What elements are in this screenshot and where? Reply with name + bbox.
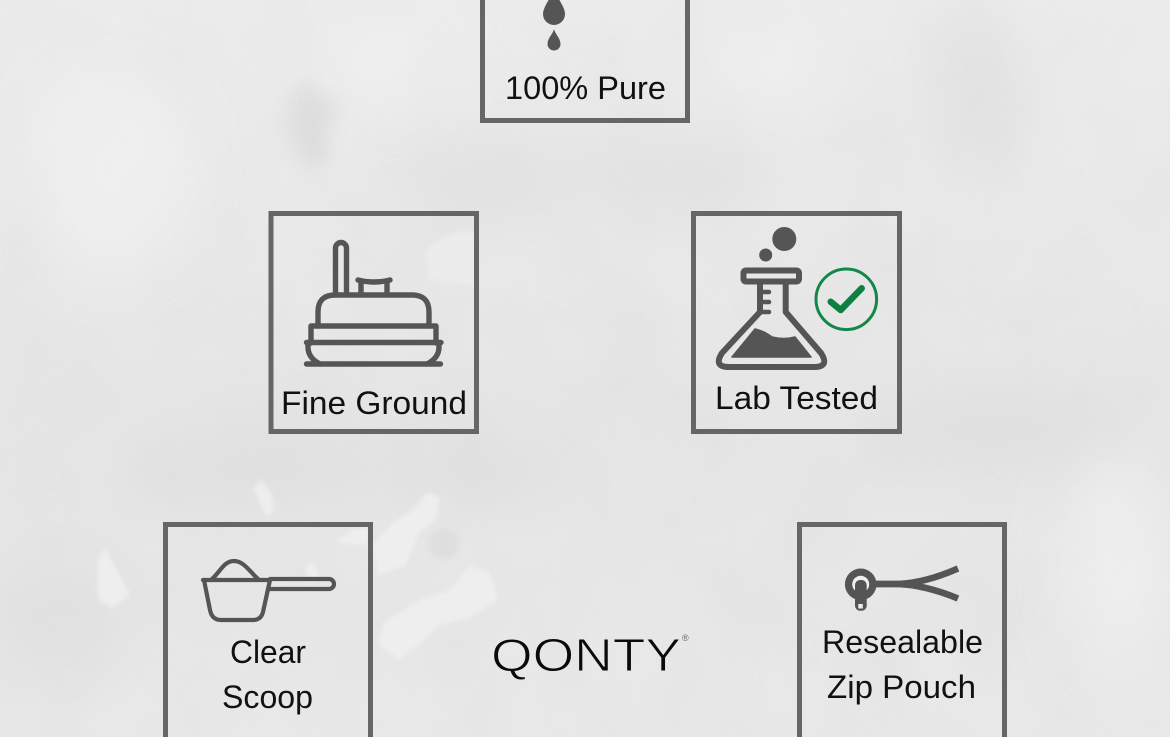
- label: Resealable Zip Pouch: Resealable: [822, 624, 983, 660]
- panel: Lab Tested: [694, 214, 900, 432]
- label: Resealable Zip Pouch: Zip Pouch: [827, 669, 976, 705]
- label: Fine Ground: Fine Ground: [281, 385, 467, 421]
- icon: green check badge: [816, 269, 877, 330]
- logo: QONTY: ®: [682, 633, 689, 643]
- label: Clear Scoop: Scoop: [222, 679, 313, 715]
- label: Clear Scoop: Clear: [230, 634, 306, 670]
- panel: Clear Scoop: [166, 524, 370, 737]
- icon: flask with bubbles: [719, 227, 824, 367]
- panel: Fine Ground: [271, 214, 476, 432]
- icon: scoop: [203, 561, 334, 620]
- panel: 100% Pure: [482, 0, 688, 120]
- icon: grinder: [306, 243, 441, 364]
- label: Resealable Zip Pouch: [822, 624, 983, 705]
- icon: zipper: [845, 568, 958, 611]
- label: 100% Pure: 100% Pure: [505, 70, 666, 106]
- label: Lab Tested: Lab Tested: [715, 380, 878, 416]
- logo: QONTY: QONTY: [491, 629, 681, 681]
- label: Clear Scoop: [222, 634, 313, 715]
- icon: water drops: [543, 0, 565, 50]
- panel: Resealable Zip Pouch: [800, 524, 1004, 737]
